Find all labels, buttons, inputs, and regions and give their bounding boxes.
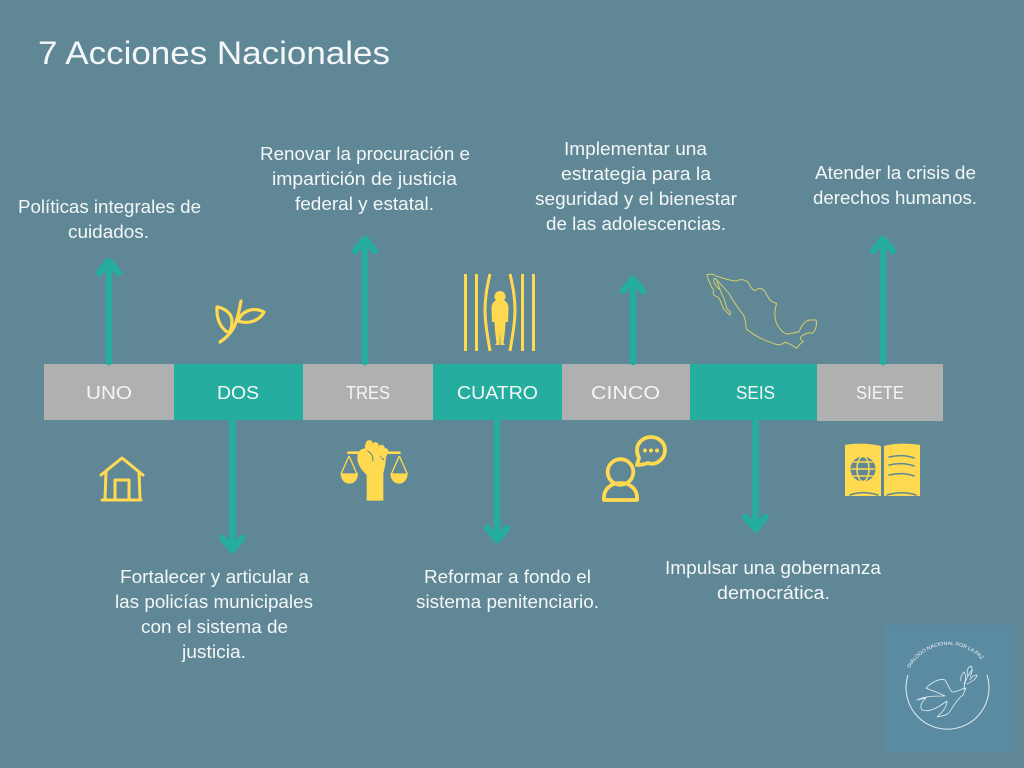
text: CINCO: Implementar una [564,138,708,159]
title: 7 Acciones Nacionales [38,35,390,71]
text: CINCO: estrategia para la [561,163,712,184]
text: CUATRO: sistema penitenciario. [416,591,599,612]
logo dove and olive branch [917,666,977,717]
icon: fist with scales [341,439,408,501]
logo [884,625,1014,752]
text: TRES: federal y estatal. [295,193,434,214]
segment: TRES: TRES [346,382,390,403]
arrow: CINCO up [623,279,643,362]
icon: open book with globe [845,444,920,496]
icon: map of Mexico [707,274,816,348]
arrow: DOS down [222,422,242,550]
text: DOS: las policías municipales [115,591,313,612]
segment: UNO: UNO [86,382,132,403]
segment: SEIS: SEIS [736,382,775,403]
text: DOS [115,566,313,662]
segment: TRES [303,364,433,420]
text: UNO [18,196,201,242]
timeline bar [44,364,943,421]
arrow: CUATRO down [487,422,507,540]
segment: UNO [44,364,174,420]
text: CUATRO [416,566,599,612]
segment: DOS: DOS [217,382,259,403]
text: CUATRO: Reformar a fondo el [424,566,591,587]
logo: DIÁLOGO NACIONAL POR LA PAZ [907,642,984,668]
segment: SIETE [817,364,943,421]
icon: house [101,458,143,500]
arrow: TRES up [355,239,375,362]
arrow: SEIS down [746,422,766,529]
text: SEIS: democrática. [717,582,830,603]
segment: CUATRO [433,364,562,420]
segment: DOS [174,364,303,420]
text: SIETE: derechos humanos. [813,187,977,208]
text: DOS: con el sistema de [141,616,288,637]
segment: CUATRO: CUATRO [457,382,538,403]
text: TRES [260,143,470,214]
segment: CINCO [562,364,690,420]
text: SIETE: Atender la crisis de [815,162,976,183]
icon: plant [217,301,264,342]
text: SIETE [813,162,977,208]
text: CINCO: seguridad y el bienestar [535,188,737,209]
arrow: UNO up [99,261,119,362]
text: DOS: justicia. [181,641,246,662]
text: CINCO [535,138,737,234]
icon: prison bars with person [466,274,534,351]
text: SEIS: Impulsar una gobernanza [665,557,882,578]
text: TRES: Renovar la procuración e [260,143,470,164]
text: TRES: impartición de justicia [272,168,458,189]
text: SEIS [665,557,882,603]
text: UNO: Políticas integrales de [18,196,201,217]
segment: CINCO: CINCO [591,382,660,403]
arrow: SIETE up [873,239,893,362]
segment: SIETE: SIETE [856,382,904,403]
icon: person with speech bubble [604,437,665,500]
text: DOS: Fortalecer y articular a [120,566,310,587]
text: CINCO: de las adolescencias. [546,213,726,234]
text: UNO: cuidados. [68,221,149,242]
segment: SEIS [690,364,817,420]
